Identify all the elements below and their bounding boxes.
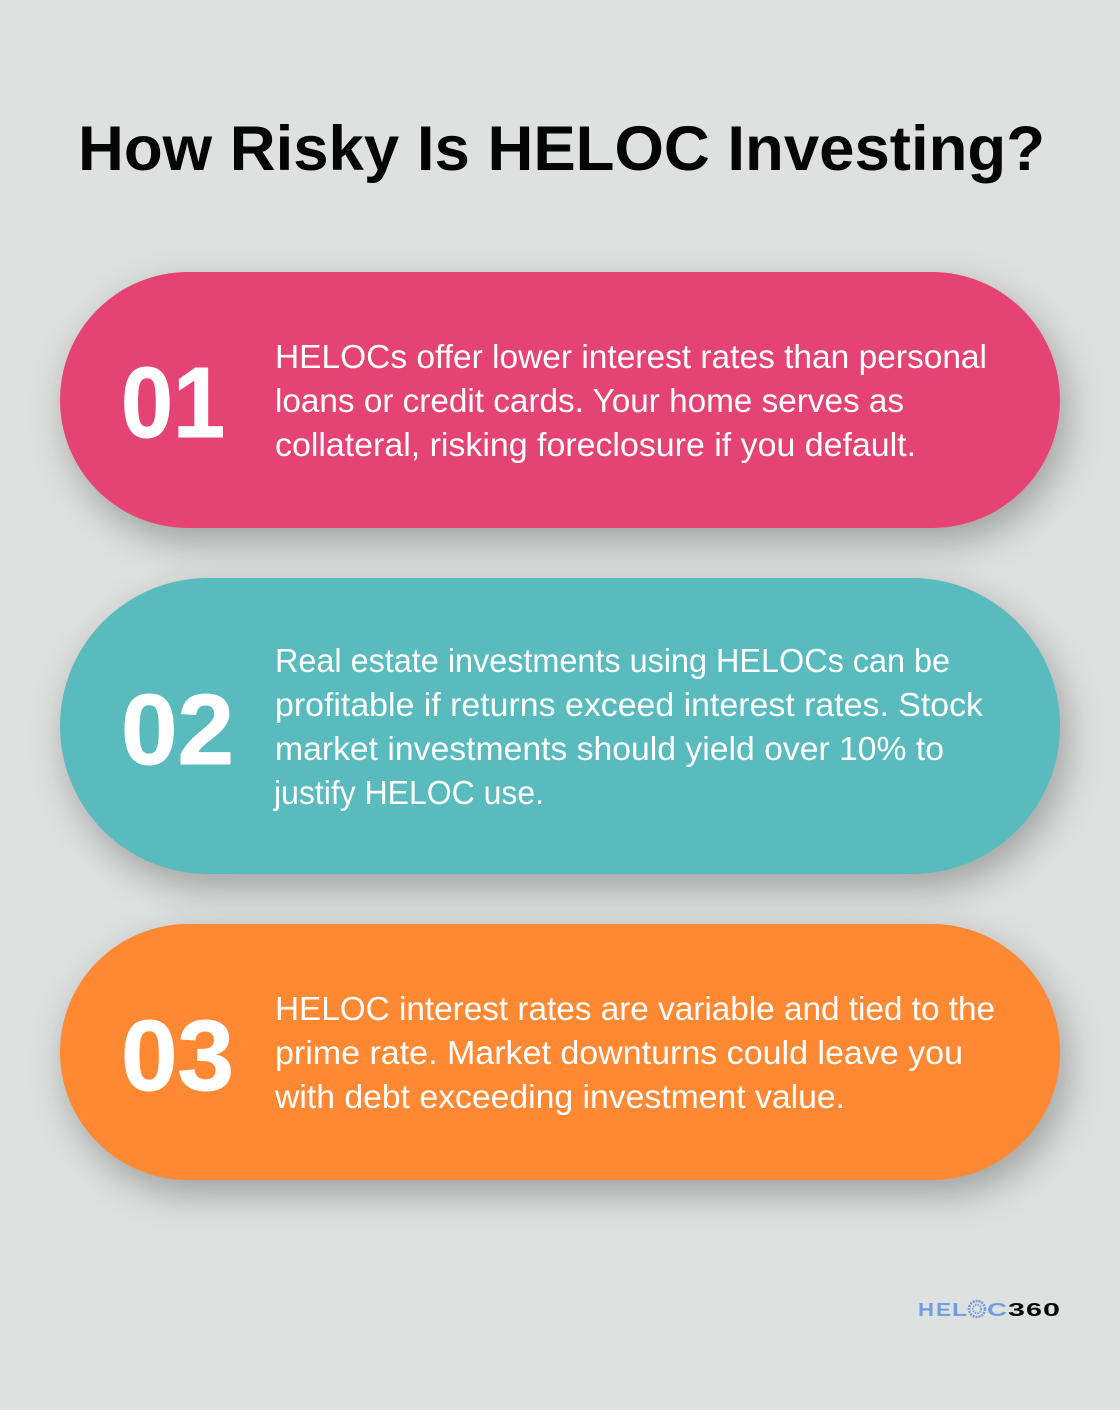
panel: step 01 (60, 272, 1060, 528)
text block: step 03 description: prime rate. Market downturns could leave you (275, 1034, 963, 1071)
panel: step 02 (60, 578, 1060, 874)
text block: step 03 description: with debt exceeding investment value. (274, 1078, 845, 1115)
text block: step 02 description: profitable if returns exceed interest rates. Stock (275, 686, 984, 723)
logo: HELOC360: C (987, 1300, 1007, 1320)
text block: step 01 description: collateral, risking foreclosure if you default. (275, 426, 916, 463)
logo: HELOC360: 6 (1026, 1300, 1042, 1320)
text block: step 02 description: justify HELOC use. (273, 774, 544, 811)
logo: HELOC360: E (936, 1300, 951, 1320)
logo: HELOC360 (918, 1300, 1060, 1320)
logo: HELOC360: 3 (1008, 1300, 1025, 1320)
number 03: 03 (121, 1000, 234, 1112)
text block: step 01 description: loans or credit cards. Your home serves as (275, 382, 904, 419)
panel: step 03 (60, 924, 1060, 1180)
number 02: 02 (121, 674, 234, 786)
text block: step 02 description: Real estate investments using HELOCs can be (275, 642, 950, 679)
text block: step 01 description (275, 338, 987, 463)
text block: step 03 description (274, 990, 995, 1115)
logo: HELOC360: 0 (1043, 1300, 1060, 1320)
logo: HELOC360: H (918, 1300, 934, 1320)
text block: step 02 description (273, 642, 984, 811)
text block: step 03 description: HELOC interest rates are variable and tied to the (275, 990, 995, 1027)
text block: step 01 description: HELOCs offer lower interest rates than personal (275, 338, 987, 375)
number 01: 01 (121, 347, 225, 459)
title: How Risky Is HELOC Investing? (78, 114, 1045, 184)
text block: step 02 description: market investments should yield over 10% to (275, 730, 944, 767)
logo: HELOC360: L (952, 1300, 967, 1320)
